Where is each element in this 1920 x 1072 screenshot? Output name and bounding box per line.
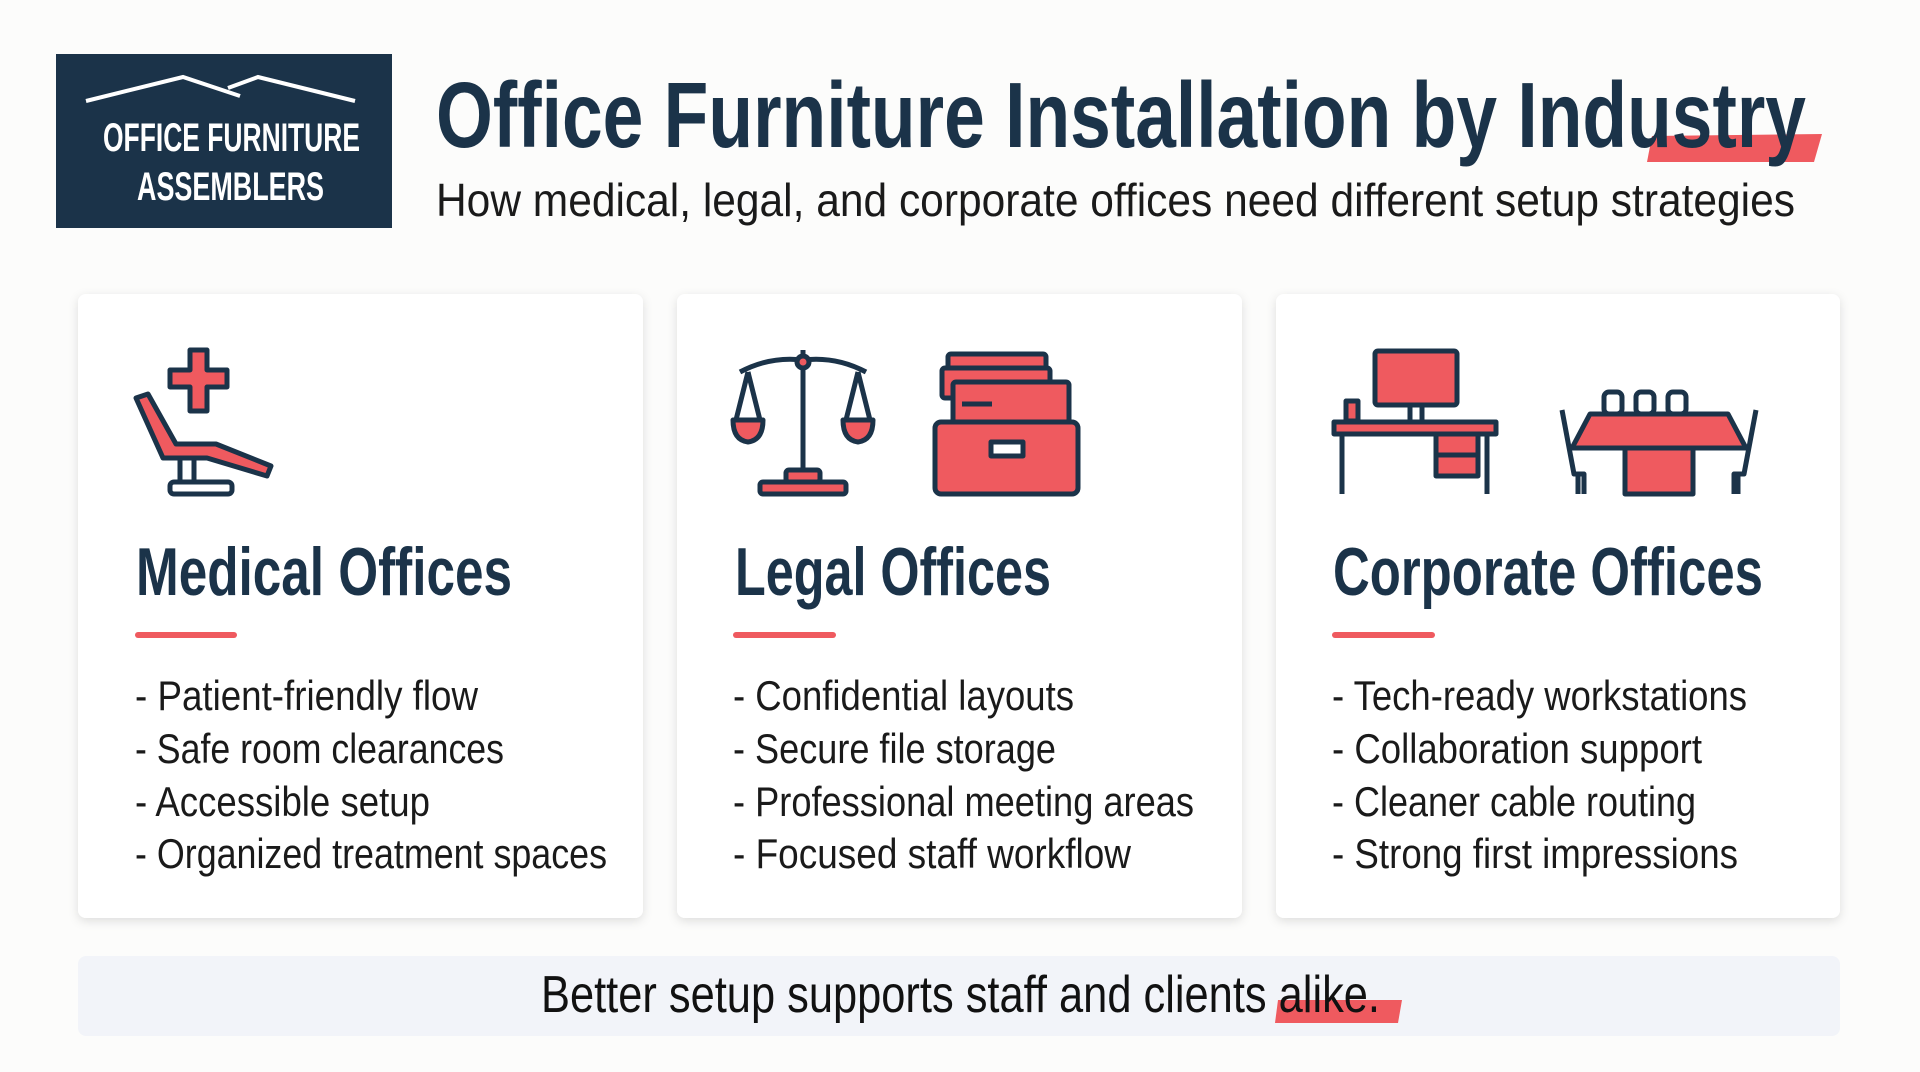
logo text (103, 116, 360, 209)
list: corporate: - Cleaner cable routing (1332, 778, 1696, 825)
list: corporate: - Strong first impressions (1332, 830, 1738, 877)
logo text: ASSEMBLERS (137, 165, 324, 209)
icon: desk (1334, 351, 1496, 494)
icon: file box (935, 354, 1078, 494)
heading: Corporate Offices: Corporate Offices (1333, 534, 1763, 610)
list: medical: - Accessible setup (135, 778, 430, 825)
list: legal: - Professional meeting areas (733, 778, 1194, 825)
list: legal: - Secure file storage (733, 725, 1056, 772)
list: legal: - Focused staff workflow (733, 830, 1132, 877)
heading: Medical Offices: Medical Offices (136, 534, 512, 610)
icon: medical chair (136, 350, 271, 494)
panel: medical (78, 294, 643, 918)
logo text: OFFICE FURNITURE (103, 116, 360, 160)
footer highlight (1275, 1000, 1402, 1023)
list: medical (135, 672, 607, 877)
list: medical: - Safe room clearances (135, 725, 504, 772)
list: legal: - Confidential layouts (733, 672, 1074, 719)
icon: roof (86, 77, 355, 101)
panel: corporate (1276, 294, 1840, 918)
icon: scales (733, 350, 873, 494)
footer text: Better setup supports staff and clients alike. (541, 966, 1380, 1024)
logo (56, 54, 392, 228)
list: corporate (1332, 672, 1747, 877)
list: corporate: - Tech-ready workstations (1332, 672, 1747, 719)
title highlight (1647, 134, 1822, 162)
heading: Legal Offices: Legal Offices (735, 534, 1051, 610)
icon: meeting table (1562, 392, 1756, 494)
panel: legal (677, 294, 1242, 918)
list: medical: - Organized treatment spaces (135, 830, 607, 877)
list: corporate: - Collaboration support (1332, 725, 1702, 772)
list: legal (733, 672, 1194, 877)
footer bar (78, 956, 1840, 1036)
list: medical: - Patient-friendly flow (135, 672, 479, 719)
subtitle: How medical, legal, and corporate offices need different setup strategies (436, 174, 1795, 226)
